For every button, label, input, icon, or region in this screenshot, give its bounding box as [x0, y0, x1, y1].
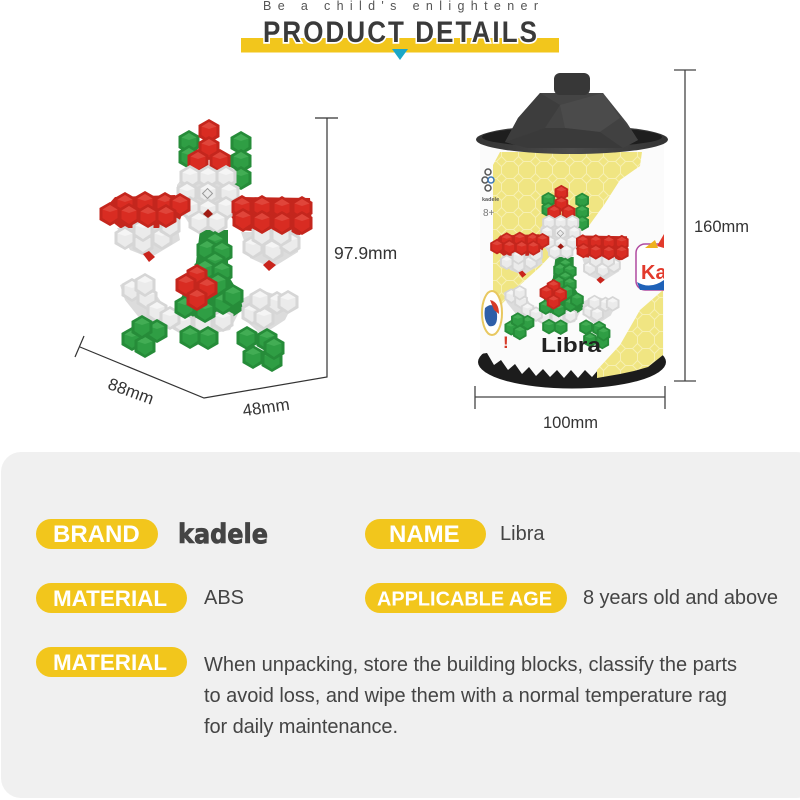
canister width dimension [475, 386, 665, 409]
product canister [476, 73, 679, 388]
toy model [100, 119, 312, 372]
age value: 8 years old and above [583, 587, 778, 609]
lower yellow pattern [597, 290, 663, 378]
pill: applicable age: APPLICABLE AGE [377, 588, 552, 610]
label: canister width: 100mm [543, 414, 598, 432]
pill: material [36, 583, 187, 613]
care instructions [204, 654, 737, 738]
box safety badge: ! [503, 333, 509, 352]
box side logo: kadele [482, 197, 499, 203]
mini toy on box [490, 185, 629, 349]
yellow bar [241, 38, 559, 52]
heading band [241, 15, 559, 60]
canister base [478, 336, 666, 388]
care instructions: to avoid loss, and wipe them with a normal temperature rag [204, 685, 727, 707]
box side logo [482, 169, 499, 219]
pill: applicable age [365, 583, 567, 613]
box side logo: 8+ [483, 208, 495, 219]
box label: Libra: Libra [541, 335, 602, 357]
pill: name: NAME [389, 521, 460, 548]
label: canister height: 160mm [694, 218, 749, 236]
care instructions: When unpacking, store the building blocks, classify the parts [204, 654, 737, 676]
toy dimension lines [75, 118, 338, 398]
canister body [480, 140, 664, 378]
pill: name [365, 519, 486, 549]
panel background [1, 452, 800, 798]
label: toy depth: 88mm [105, 374, 156, 408]
box brand badge [635, 234, 664, 291]
label: toy width: 48mm [241, 395, 291, 420]
black cap [505, 73, 638, 148]
name value: Libra [500, 523, 545, 545]
label: toy height: 97.9mm [334, 243, 397, 263]
pill: material: MATERIAL [53, 586, 167, 611]
pill: brand: BRAND [53, 521, 140, 548]
pill: brand [36, 519, 158, 549]
care instructions: for daily maintenance. [204, 716, 398, 738]
box brand badge: Kad [641, 262, 679, 284]
pill: care: MATERIAL [53, 650, 167, 675]
rim [476, 125, 668, 154]
rim opening [482, 127, 662, 147]
panel: specifications [1, 452, 800, 798]
material value: ABS [204, 587, 244, 609]
box safety badge [482, 291, 509, 352]
upper yellow pattern [493, 152, 642, 306]
canister height dimension [674, 70, 696, 381]
pill: care [36, 647, 187, 677]
blue pointer [392, 49, 408, 60]
brand logo: kadele [178, 519, 268, 550]
title: PRODUCT DETAILS [263, 15, 537, 48]
